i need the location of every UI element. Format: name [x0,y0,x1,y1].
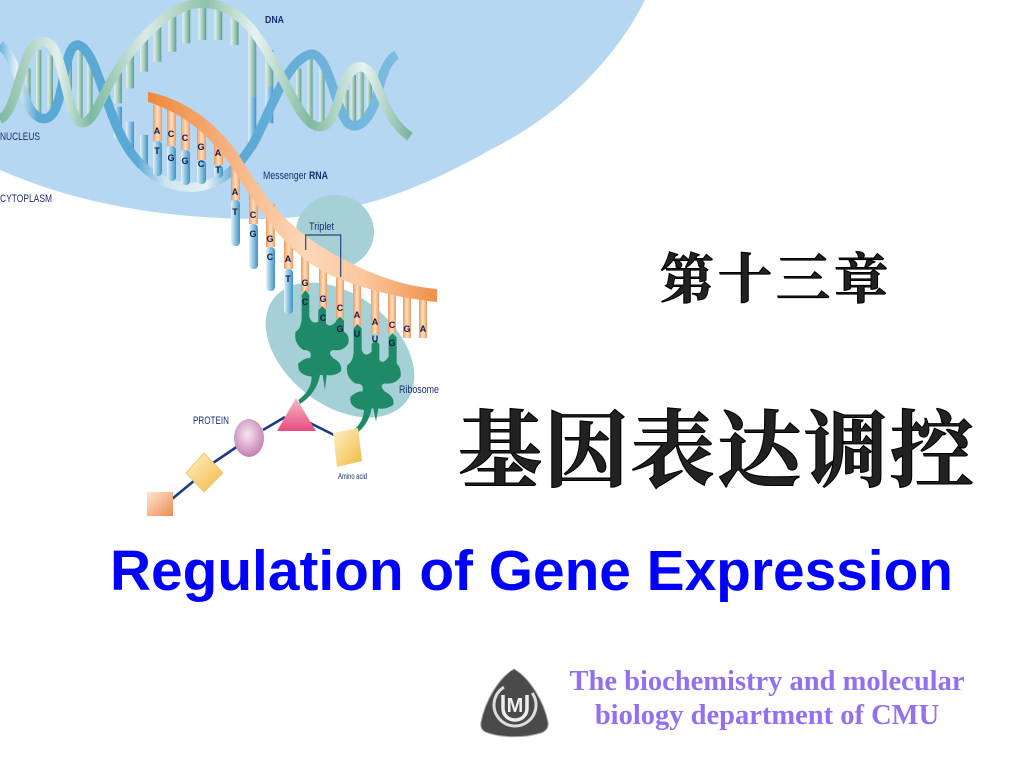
university logo: M [507,695,523,717]
transfer RNA molecules [295,290,401,436]
amino acid: orange square [147,492,173,516]
base letters: C [267,252,274,262]
base letters: G [266,234,274,244]
base letters: T [232,207,238,217]
label: amino acid: Amino acid [338,472,367,481]
base letters: T [215,165,221,175]
base letters: C [182,133,189,143]
base letters: C [198,159,205,169]
base letters: C [302,297,309,307]
base letters: A [215,148,222,158]
base letters: G [388,338,396,348]
label: ribosome: Ribosome [399,384,439,396]
base letters: G [249,229,257,239]
chapter number: 第十三章 [660,250,888,310]
label: cytoplasm: CYTOPLASM [0,193,52,205]
base letters: A [232,187,239,197]
base letters: C [389,320,396,330]
nucleus background [0,0,645,219]
base letters: G [167,153,175,163]
base letters: T [154,146,160,156]
label: triplet: Triplet [309,221,334,233]
triplet bracket [306,235,341,277]
base letters: G [319,294,327,304]
base letters [154,126,427,348]
base letters: G [301,278,309,288]
department name: The biochemistry and molecular [569,666,965,697]
DNA double helix [0,3,410,187]
base letters: C [168,129,175,139]
base letters: U [354,329,360,339]
label: DNA: DNA [265,14,284,26]
ribosome small subunit [296,195,374,269]
base letters: A [372,317,379,327]
label: protein: PROTEIN [193,415,229,427]
amino acid: pink triangle [277,398,316,431]
amino acid: yellow square [333,428,362,467]
base letters: A [285,254,292,264]
base letters: G [403,324,411,334]
base letters: A [154,126,161,136]
messenger RNA strand [148,92,437,302]
messenger RNA rods [153,105,427,338]
amino acid: yellow diamond [186,453,223,492]
base letters: A [354,310,361,320]
department name [569,666,965,731]
department name: biology department of CMU [595,700,939,731]
base letters: A [420,324,427,334]
ribosome large subunit [240,255,440,445]
base letters: C [320,313,327,323]
base letters: C [250,210,257,220]
base letters: C [337,303,344,313]
English title: Regulation of Gene Expression [110,539,953,603]
Chinese title: 基因表达调控 [458,406,974,499]
protein chain links [172,417,334,499]
label: messenger RNA: Messenger RNA [263,170,328,182]
amino acid: purple ellipse [234,419,264,457]
university logo [481,669,548,737]
base letters: U [372,334,378,344]
base letters: G [336,324,344,334]
label: nucleus: NUCLEUS [0,131,40,143]
base letters: T [285,274,291,284]
base letters: G [197,142,205,152]
base letters: G [181,156,189,166]
